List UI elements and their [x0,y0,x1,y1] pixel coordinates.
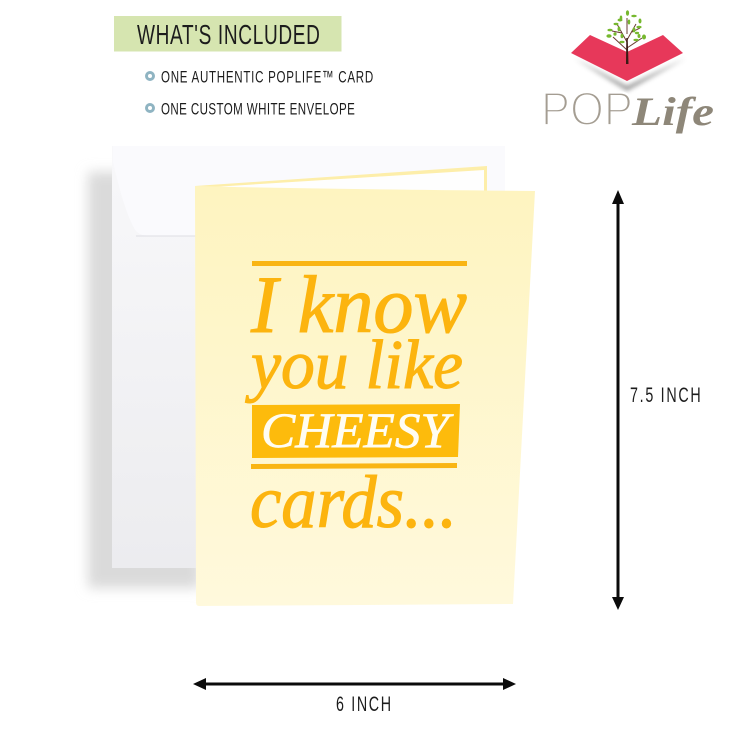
card text: i know: I know [250,259,467,350]
logo: poplife [541,10,714,135]
envelope body [112,146,505,568]
icon: tree [606,10,646,64]
card: lower rule [251,463,457,469]
card front [195,186,535,606]
icon: red book [571,35,683,81]
card text: cards: cards... [250,461,457,544]
wordmark: life: Life [631,89,714,134]
list: included items [146,68,373,119]
heading: what's included: WHAT'S INCLUDED [137,19,320,51]
label: height: 7.5 INCH [630,383,701,407]
greeting card [195,166,535,606]
bullet: envelope item: ONE CUSTOM WHITE ENVELOPE [161,100,355,119]
label: width: 6 INCH [336,692,391,716]
card text: you like: you like [245,327,463,404]
wordmark: pop: POP [541,82,633,135]
card: cheesy banner: CHEESY [261,402,454,458]
card back panel [195,166,487,200]
dimension arrow: width [193,678,516,690]
envelope [88,146,505,588]
bullet: card item: ONE AUTHENTIC POPLIFE™ CARD [161,68,373,87]
icon: book shadow [574,58,686,91]
card: top rule [252,261,467,266]
dimension arrow: height [612,190,624,610]
envelope flap [113,146,505,236]
envelope shadow [88,172,200,588]
